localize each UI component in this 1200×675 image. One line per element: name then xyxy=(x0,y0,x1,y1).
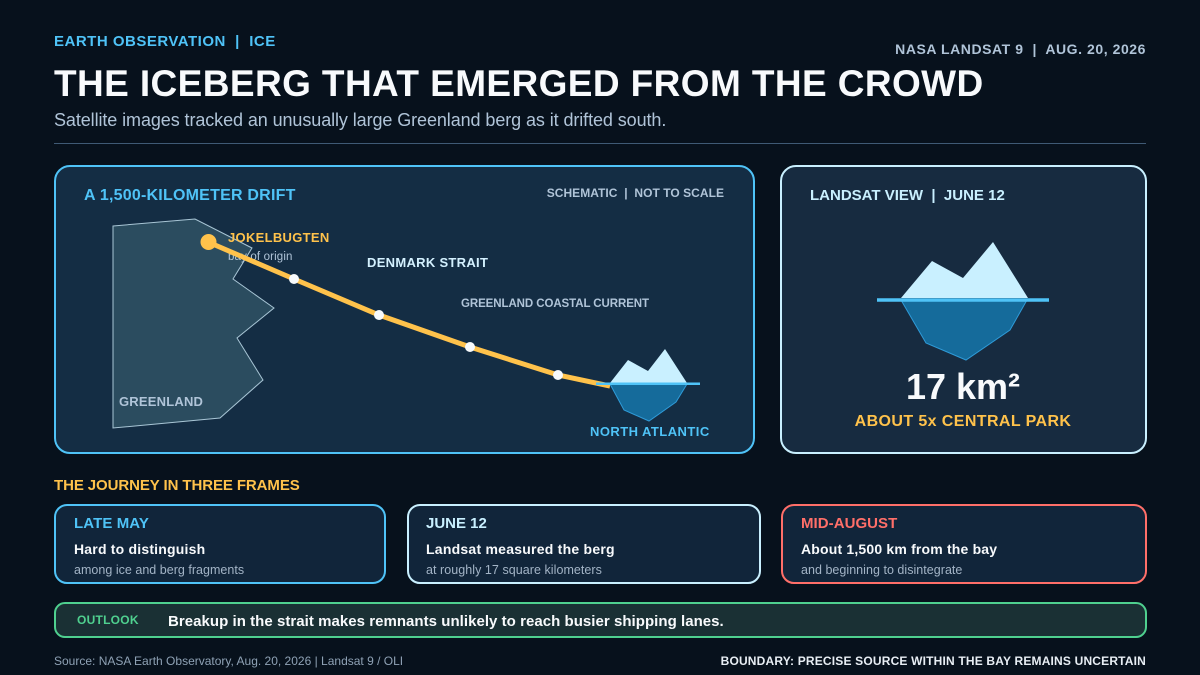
outlook banner: Breakup in the strait makes remnants unlikely to reach busier shipping lanes. xyxy=(168,613,724,630)
card: late May: among ice and berg fragments xyxy=(74,563,244,577)
eyebrow: EARTH OBSERVATION | ICE xyxy=(54,33,276,50)
Landsat heading: LANDSAT VIEW | JUNE 12 xyxy=(810,187,1005,204)
icon: large iceberg xyxy=(877,242,1049,360)
card: mid-August: and beginning to disintegrate xyxy=(801,563,962,577)
card: June 12: JUNE 12 xyxy=(426,515,487,532)
Denmark Strait label: DENMARK STRAIT xyxy=(367,255,488,270)
outlook banner xyxy=(55,603,1146,637)
card: late May xyxy=(55,505,385,583)
icon: small iceberg xyxy=(596,349,700,421)
North Atlantic label: NORTH ATLANTIC xyxy=(590,424,710,439)
section heading: THE JOURNEY IN THREE FRAMES xyxy=(54,477,300,494)
card: late May: Hard to distinguish xyxy=(74,541,205,557)
card: mid-August: MID-AUGUST xyxy=(801,515,897,532)
title: THE ICEBERG THAT EMERGED FROM THE CROWD xyxy=(54,63,984,104)
outlook banner: OUTLOOK xyxy=(77,613,139,627)
comparison: ABOUT 5x CENTRAL PARK xyxy=(855,413,1071,430)
bay of origin label: bay of origin xyxy=(228,251,293,263)
current label: GREENLAND COASTAL CURRENT xyxy=(461,298,649,310)
card: mid-August xyxy=(782,505,1146,583)
source and date tag: NASA LANDSAT 9 | AUG. 20, 2026 xyxy=(895,41,1146,57)
Jokelbugten label: JOKELBUGTEN xyxy=(228,230,330,245)
panel: drift map xyxy=(55,166,754,453)
source note: Source: NASA Earth Observatory, Aug. 20, 2026 | Landsat 9 / OLI xyxy=(54,654,403,668)
card: June 12: at roughly 17 square kilometers xyxy=(426,563,602,577)
card: June 12: Landsat measured the berg xyxy=(426,541,615,557)
boundary note: BOUNDARY: PRECISE SOURCE WITHIN THE BAY REMAINS UNCERTAIN xyxy=(721,654,1146,668)
drift route xyxy=(200,234,610,386)
panel: Landsat view xyxy=(781,166,1146,453)
subtitle: Satellite images tracked an unusually large Greenland berg as it drifted south. xyxy=(54,110,666,130)
Greenland landmass xyxy=(113,219,274,428)
area figure: 17 km² xyxy=(906,366,1020,407)
Greenland label: GREENLAND xyxy=(119,394,203,409)
card: June 12 xyxy=(408,505,760,583)
card: mid-August: About 1,500 km from the bay xyxy=(801,541,997,557)
schematic note: SCHEMATIC | NOT TO SCALE xyxy=(547,186,724,200)
map heading: A 1,500-KILOMETER DRIFT xyxy=(84,187,296,204)
card: late May: LATE MAY xyxy=(74,515,149,532)
